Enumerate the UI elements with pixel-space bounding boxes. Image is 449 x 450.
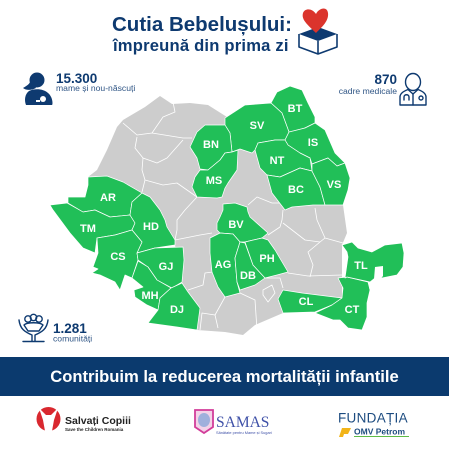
county: AG xyxy=(210,233,240,297)
title xyxy=(112,13,292,55)
banner xyxy=(0,357,449,396)
delta lagoon xyxy=(369,266,383,292)
county: CT: CT xyxy=(345,304,360,316)
logo: Fundația OMV Petrom: OMV Petrom xyxy=(354,426,405,436)
county: VS: VS xyxy=(327,179,341,191)
icon: mother and child xyxy=(23,72,53,105)
county: DJ: DJ xyxy=(170,304,184,316)
county: AR xyxy=(68,176,142,217)
caption: comunități xyxy=(53,334,92,344)
county: BV xyxy=(217,203,268,242)
county: AR: AR xyxy=(100,192,116,204)
icon: hands holding people xyxy=(19,314,48,342)
county: HD: HD xyxy=(143,221,159,233)
map of Romania xyxy=(50,86,404,335)
county: BV: BV xyxy=(228,219,244,231)
county: DJ xyxy=(148,283,200,330)
county: BC: BC xyxy=(288,184,304,196)
county: TM xyxy=(50,203,135,253)
banner: Contribuim la reducerea mortalității infantile xyxy=(50,367,399,386)
county: IS xyxy=(285,123,345,166)
county: BT xyxy=(271,86,315,132)
number: 1.281 xyxy=(53,321,87,336)
logo: SAMAS: Sănătate pentru Mame și Sugari xyxy=(216,430,272,435)
county: BN: BN xyxy=(203,139,219,151)
county: MS: MS xyxy=(206,175,222,187)
logo: Salvați Copiii: Salvați Copiii xyxy=(65,415,131,427)
county: NT xyxy=(255,140,312,177)
county: TM: TM xyxy=(80,223,96,235)
logo: Salvați Copiii xyxy=(36,407,131,432)
title: împreună din prima zi xyxy=(112,36,289,55)
county: TL: TL xyxy=(354,260,368,272)
county: PH xyxy=(245,238,288,278)
county: NT: NT xyxy=(270,155,285,167)
county: DB: DB xyxy=(240,270,256,282)
county: BC xyxy=(267,168,325,210)
map: grey counties xyxy=(88,96,347,335)
county: BT: BT xyxy=(288,103,303,115)
logo: SAMAS xyxy=(195,410,272,435)
county: DB xyxy=(235,242,265,290)
county: CL: CL xyxy=(299,296,314,308)
county: CL xyxy=(278,290,342,313)
county: TL xyxy=(342,242,404,282)
caption: cadre medicale xyxy=(339,86,397,96)
stat: communities xyxy=(19,314,92,344)
logo: Salvați Copiii: Save the Children Romania xyxy=(65,427,124,432)
stat: mothers and newborns xyxy=(23,71,135,105)
county: SV xyxy=(225,103,289,153)
icon: heart in box xyxy=(299,9,337,54)
county: CS xyxy=(92,230,142,290)
logo: Fundația OMV Petrom: FUNDAȚIA xyxy=(338,410,408,426)
number: 15.300 xyxy=(56,71,97,86)
county: IS: IS xyxy=(308,137,318,149)
county: SV: SV xyxy=(250,120,265,132)
county: AG: AG xyxy=(215,259,231,271)
logo: Fundația OMV Petrom xyxy=(338,410,409,437)
county: GJ xyxy=(137,247,184,288)
county: CT xyxy=(315,277,370,330)
county: MH: MH xyxy=(141,290,159,302)
stat: medical staff xyxy=(339,72,426,105)
county: GJ: GJ xyxy=(159,261,173,273)
title: Cutia Bebelușului: xyxy=(112,13,292,36)
county: MH xyxy=(132,261,171,310)
county: CS: CS xyxy=(110,251,126,263)
county: BN xyxy=(190,125,232,170)
icon: doctor xyxy=(400,74,426,105)
caption: mame și nou-născuți xyxy=(56,83,135,93)
county: VS xyxy=(312,158,350,205)
county: MS xyxy=(192,150,238,198)
number: 870 xyxy=(374,72,397,87)
county: PH: PH xyxy=(259,253,275,265)
county: HD xyxy=(130,193,175,253)
logo: SAMAS: SAMAS xyxy=(216,414,269,431)
